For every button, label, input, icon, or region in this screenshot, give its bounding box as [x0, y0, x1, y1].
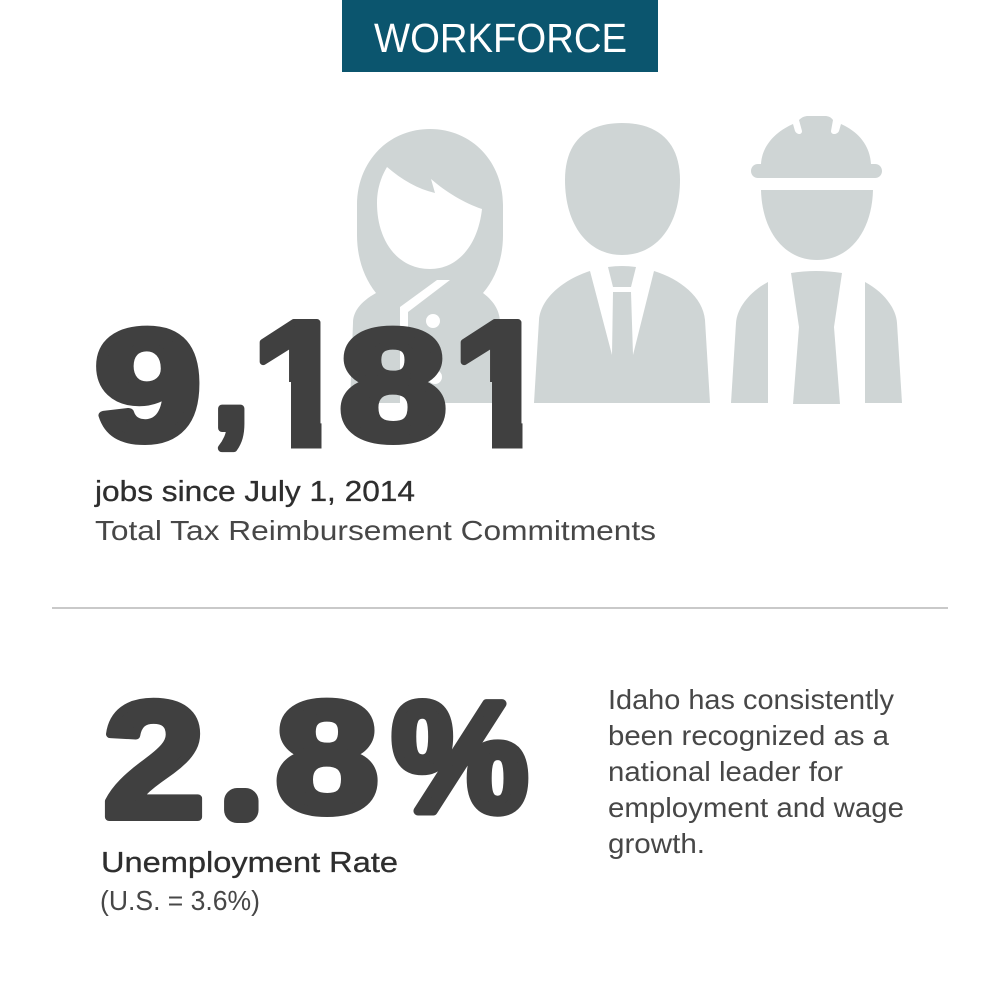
- statistic: 9,181: 8: [340, 299, 446, 473]
- statistic: 2.8%: 8: [276, 671, 378, 845]
- statistic: 2.8%: %: [392, 671, 528, 845]
- label: Unemployment Rate: Unemployment Rate: [101, 847, 398, 879]
- icon: three workers: [350, 116, 902, 404]
- text block: Idaho description: been recognized as a: [608, 720, 889, 751]
- text block: Idaho description: employment and wage: [608, 792, 904, 823]
- text block: Idaho description: national leader for: [608, 756, 843, 787]
- statistic: 9,181: [96, 319, 522, 452]
- label: jobs since July 1, 2014: jobs since July 1, 2014: [94, 476, 415, 508]
- text block: Idaho description: [608, 684, 904, 859]
- text block: Idaho description: Idaho has consistently: [608, 684, 894, 715]
- statistic: 2.8%: [103, 668, 528, 852]
- statistic: 2.8%: 2: [103, 668, 205, 852]
- statistic: 9,181: 9: [95, 299, 201, 473]
- title banner: [342, 0, 658, 72]
- statistic: 9,181: ,: [213, 310, 249, 456]
- label: U.S. rate: (U.S. = 3.6%): [100, 885, 260, 916]
- statistic: 2.8%: .: [233, 756, 250, 823]
- icon: construction worker: [731, 116, 902, 404]
- text block: Idaho description: growth.: [608, 828, 705, 859]
- divider: [52, 607, 948, 609]
- icon: businessman: [534, 123, 710, 403]
- statistic: 9,181: 1: [452, 284, 551, 483]
- title banner: WORKFORCE: [374, 15, 627, 61]
- label: Total Tax Reimbursement Commitments: Total Tax Reimbursement Commitments: [95, 515, 656, 546]
- statistic: 9,181: 1: [251, 284, 350, 483]
- icon: businesswoman: [350, 129, 503, 403]
